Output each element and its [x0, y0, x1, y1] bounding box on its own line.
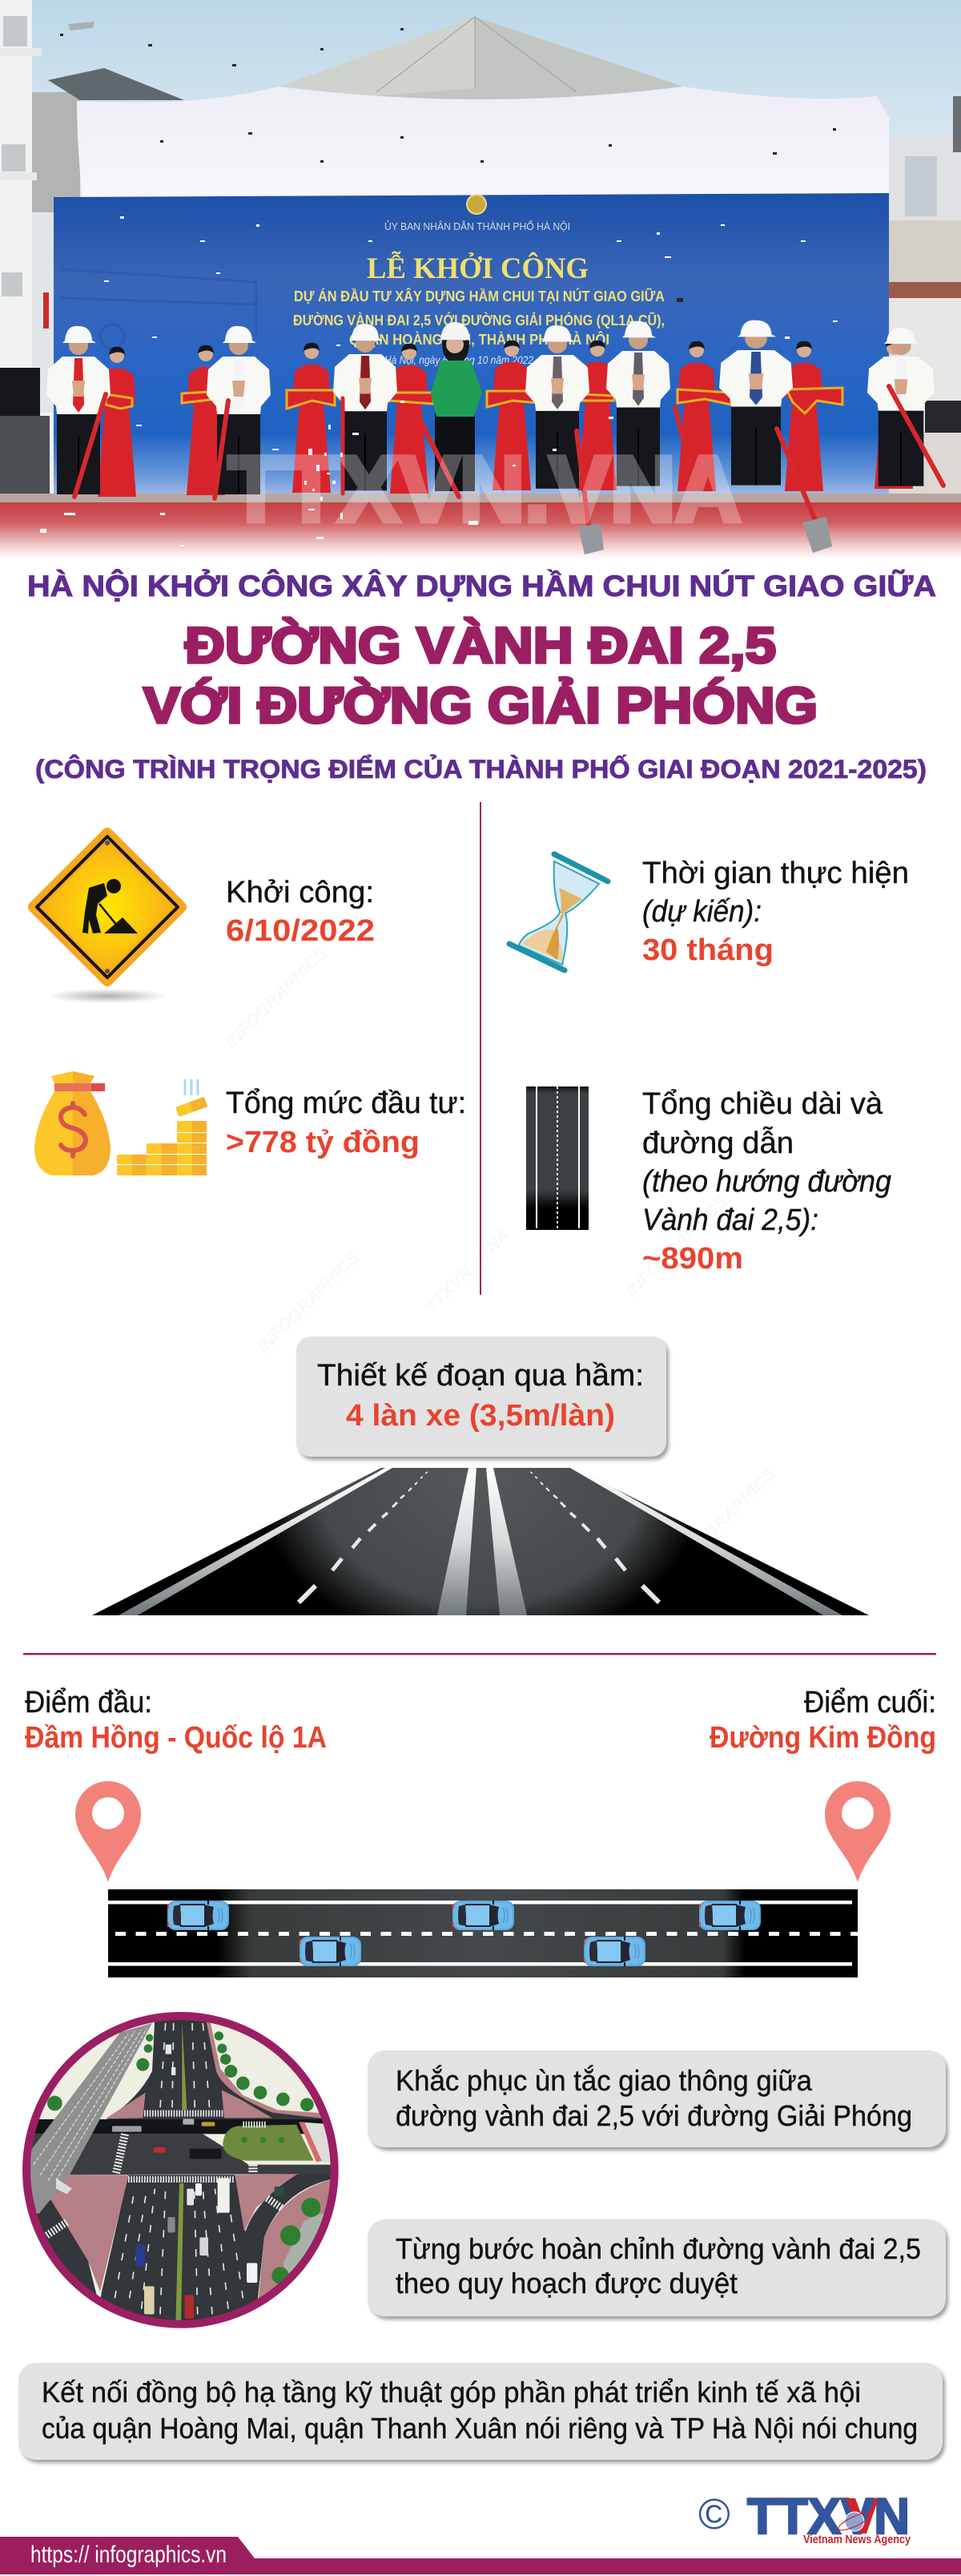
left buildings — [0, 0, 184, 496]
text: duration: 30 tháng — [642, 933, 774, 967]
title: VỚI ĐƯỜNG GIẢI PHÓNG — [143, 677, 818, 734]
text: end point — [710, 1686, 936, 1755]
text: total length: đường dẫn — [642, 1126, 794, 1160]
logo: TTXVN: TTXVN — [747, 2489, 910, 2545]
icon: straight road — [526, 1086, 589, 1230]
blue backdrop — [54, 193, 889, 494]
backdrop text — [293, 220, 665, 366]
callout: benefit 3 — [18, 2363, 943, 2460]
faint watermarks: INFOGRAPHICS — [669, 1463, 779, 1574]
backdrop text: ĐƯỜNG VÀNH ĐAI 2,5 VỚI ĐƯỜNG GIẢI PHÓNG (QL1A CŨ), — [293, 312, 665, 329]
icon: money bag and coins — [34, 1071, 207, 1175]
shovels — [74, 386, 943, 526]
car — [167, 1901, 229, 1930]
faint watermarks — [221, 942, 779, 1574]
illustration: route road with cars — [108, 1889, 858, 1977]
car — [584, 1937, 645, 1966]
car — [452, 1901, 514, 1930]
agency watermark on photo: TTXVN.VNA — [228, 438, 741, 541]
text: start point — [25, 1686, 327, 1755]
logo: TTXVN: Vietnam News Agency — [803, 2534, 911, 2546]
callout: tunnel design — [296, 1336, 666, 1457]
text: start date — [226, 876, 375, 948]
silver scrap — [68, 22, 94, 30]
icon: end pin — [825, 1781, 891, 1882]
text: start date: Khởi công: — [226, 876, 374, 909]
heading: kicker: HÀ NỘI KHỞI CÔNG XÂY DỰNG HẦM CHUI NÚT GIAO GIỮA — [27, 569, 936, 603]
text: duration — [642, 857, 909, 967]
text: duration: (dự kiến): — [642, 895, 762, 929]
backdrop text: Hà Nội, ngày 6 tháng 10 năm 2022 — [384, 353, 533, 366]
sky — [0, 0, 961, 497]
emblem — [467, 195, 486, 214]
photo: groundbreaking ceremony — [0, 0, 961, 559]
section divider — [23, 1653, 936, 1655]
icon: road works sign — [34, 833, 181, 1003]
backdrop bus outline — [60, 269, 256, 349]
callout: benefit 1 — [368, 2050, 946, 2147]
text: total length — [642, 1087, 891, 1276]
callout: tunnel design: Thiết kế đoạn qua hầm: — [317, 1359, 644, 1393]
faint watermarks: TTXVN - VNA — [421, 1224, 513, 1317]
callout: benefit 3: Kết nối đồng bộ hạ tầng kỹ thuật góp phần phát triển kinh tế xã hội — [42, 2376, 861, 2409]
shovel blades — [578, 517, 832, 554]
text: end point: Đường Kim Đồng — [710, 1721, 936, 1755]
text: start point: Đầm Hồng - Quốc lộ 1A — [25, 1721, 327, 1755]
illustration: four lane road in perspective — [92, 1468, 869, 1615]
ribbons — [106, 388, 842, 413]
callout: benefit 3: của quận Hoàng Mai, quận Thanh Xuân nói riêng và TP Hà Nội nói chung — [42, 2412, 918, 2445]
confetti — [40, 216, 838, 546]
text: start date: 6/10/2022 — [226, 914, 375, 948]
subtitle: (CÔNG TRÌNH TRỌNG ĐIỂM CỦA THÀNH PHỐ GIAI ĐOẠN 2021-2025) — [35, 755, 927, 784]
title: ĐƯỜNG VÀNH ĐAI 2,5 — [185, 618, 776, 674]
footer band: https:// infographics.vn — [30, 2542, 227, 2568]
text: total length: Vành đai 2,5): — [642, 1203, 818, 1237]
faint watermarks: INFOGRAPHICS — [221, 942, 331, 1053]
official in green jacket — [431, 322, 482, 491]
callout: benefit 1: Khắc phục ùn tắc giao thông giữa — [396, 2064, 813, 2097]
text: start point: Điểm đầu: — [25, 1686, 152, 1719]
dark confetti — [60, 28, 836, 302]
white sheet — [77, 87, 889, 199]
ribbon bearers — [98, 339, 913, 497]
text: total investment — [226, 1086, 466, 1159]
backdrop text: LỄ KHỞI CÔNG — [367, 250, 589, 285]
officials — [46, 320, 935, 494]
callout: benefit 2 — [368, 2219, 946, 2316]
text: total investment: Tổng mức đầu tư: — [226, 1086, 466, 1120]
icon: hourglass — [509, 854, 608, 970]
right buildings — [889, 96, 961, 497]
text: total length: ~890m — [642, 1242, 743, 1276]
vertical divider — [480, 802, 481, 1295]
text: total length: Tổng chiều dài và — [642, 1087, 883, 1121]
title — [143, 618, 818, 734]
footer band — [0, 2537, 961, 2574]
callout: tunnel design: 4 làn xe (3,5m/làn) — [346, 1399, 615, 1433]
icon: start pin — [75, 1781, 141, 1882]
backdrop text: ỦY BAN NHÂN DÂN THÀNH PHỐ HÀ NỘI — [384, 220, 570, 232]
car — [300, 1937, 361, 1966]
text: total investment: >778 tỷ đồng — [226, 1126, 420, 1159]
tent roof — [279, 17, 683, 104]
backdrop text: QUẬN HOÀNG MAI, THÀNH PHỐ HÀ NỘI — [349, 331, 609, 348]
callout: benefit 2: Từng bước hoàn chỉnh đường vành đai 2,5 — [396, 2232, 921, 2265]
faint watermarks: INFOGRAPHICS — [621, 1191, 731, 1301]
text: total length: (theo hướng đường — [642, 1165, 891, 1199]
ground — [0, 502, 961, 559]
callout: benefit 1: đường vành đai 2,5 với đường Giải Phóng — [396, 2099, 912, 2132]
callout: benefit 2: theo quy hoạch được duyệt — [396, 2267, 738, 2300]
car — [699, 1901, 761, 1930]
text: duration: Thời gian thực hiện — [642, 857, 909, 890]
faint watermarks: INFOGRAPHICS — [253, 1247, 363, 1357]
copyright mark: © — [698, 2490, 730, 2538]
backdrop text: DỰ ÁN ĐẦU TƯ XÂY DỰNG HẦM CHUI TẠI NÚT GIAO GIỮA — [294, 288, 665, 304]
text: end point: Điểm cuối: — [804, 1686, 936, 1719]
illustration: intersection render in circle — [16, 2007, 344, 2336]
